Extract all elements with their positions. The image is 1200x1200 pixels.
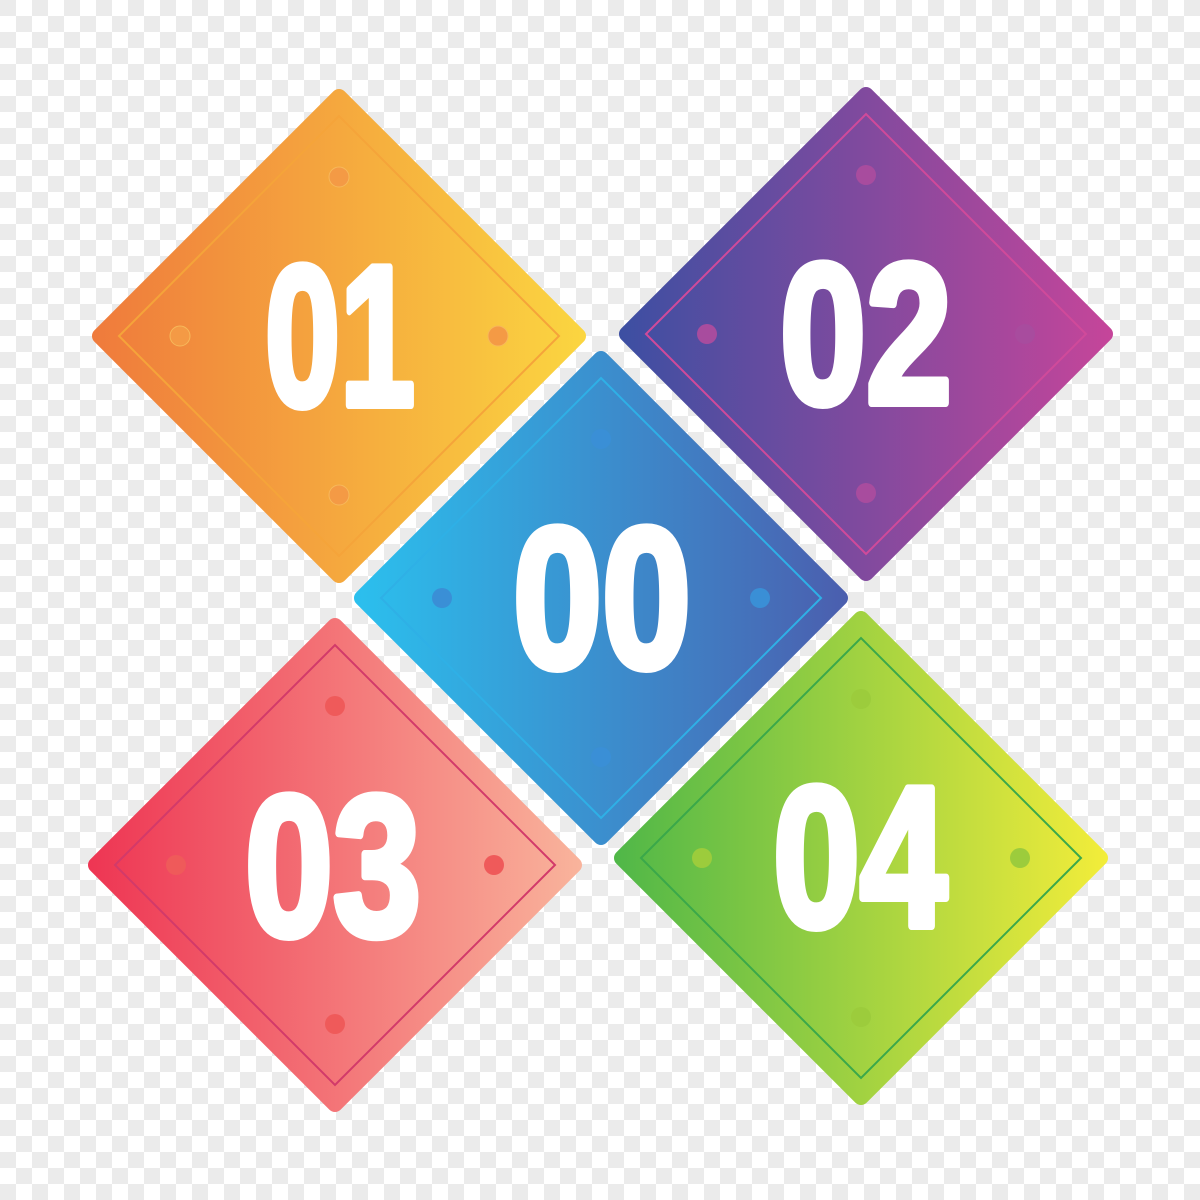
diamond 00	[351, 348, 851, 848]
diamond 01: 01	[265, 225, 415, 448]
diamond 03	[85, 615, 585, 1115]
diamond 04: 04	[773, 746, 947, 969]
diamond 04	[611, 608, 1111, 1108]
diamond 02	[616, 84, 1116, 584]
diamond 01	[89, 86, 589, 586]
diamond 02: 02	[780, 223, 952, 446]
diamond 03: 03	[245, 755, 421, 978]
diamond 00: 00	[513, 487, 691, 710]
